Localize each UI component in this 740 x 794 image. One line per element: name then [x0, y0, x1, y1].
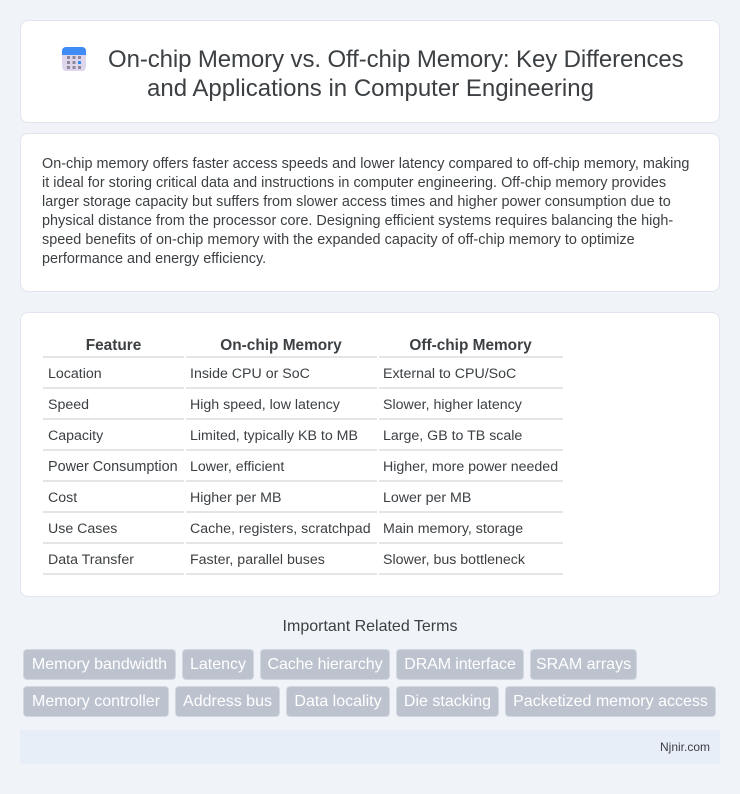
footer bar: [20, 730, 720, 764]
table header: Feature: [86, 337, 141, 354]
row: speed: Slower, higher latency: [383, 397, 522, 413]
tags: related terms: Address bus: [183, 693, 272, 710]
row: cost: Higher per MB: [190, 490, 281, 506]
row: location: Location: [48, 366, 102, 382]
tags: related terms: [23, 649, 716, 717]
row: power consumption: Power Consumption: [48, 459, 178, 475]
row: data transfer: [48, 552, 525, 568]
row: data transfer: Slower, bus bottleneck: [383, 552, 525, 568]
row: capacity: [48, 428, 522, 444]
row: capacity: Large, GB to TB scale: [383, 428, 522, 444]
text block: intro: performance and energy efficiency.: [42, 251, 266, 267]
tags: related terms: Memory bandwidth: [32, 656, 167, 673]
tags: related terms: Data locality: [294, 693, 382, 710]
tags: related terms: DRAM interface: [404, 656, 516, 673]
icon: calendar chip: [62, 47, 86, 71]
row: capacity: Limited, typically KB to MB: [190, 428, 358, 444]
tags: related terms: SRAM arrays: [536, 656, 631, 673]
row: data transfer: Faster, parallel buses: [190, 552, 325, 568]
row: capacity: Capacity: [48, 428, 103, 444]
row: location: Inside CPU or SoC: [190, 366, 310, 382]
panel: intro paragraph: [20, 133, 720, 292]
row: use cases: Main memory, storage: [383, 521, 523, 537]
text block: intro: physical distance from the processor core. Designing efficient systems requires balancing the high-: [42, 213, 673, 229]
title: [108, 46, 684, 102]
row: speed: Speed: [48, 397, 89, 413]
footer credit: Njnir.com: [660, 740, 710, 754]
row: speed: High speed, low latency: [190, 397, 340, 413]
row: use cases: Cache, registers, scratchpad: [190, 521, 371, 537]
text block: intro: larger storage capacity but suffers from slower access times and higher power consumption due to: [42, 194, 671, 210]
tags: related terms: Memory controller: [32, 693, 160, 710]
tags: related terms: Cache hierarchy: [267, 656, 382, 673]
row: cost: Cost: [48, 490, 77, 506]
text block: intro: [42, 156, 689, 267]
row: cost: Lower per MB: [383, 490, 471, 506]
table header: On-chip Memory: [220, 337, 342, 354]
row: location: [48, 366, 516, 382]
row: cost: [48, 490, 471, 506]
row: location: External to CPU/SoC: [383, 366, 516, 382]
tags: related terms: Die stacking: [404, 693, 491, 710]
title: On-chip Memory vs. Off-chip Memory: Key Differences: [108, 46, 684, 73]
row: use cases: Use Cases: [48, 521, 117, 537]
text block: intro: speed benefits of on-chip memory with the expanded capacity of off-chip memory to optimize: [42, 232, 635, 248]
row: power consumption: [48, 459, 558, 475]
text block: intro: it ideal for storing critical data and instructions in computer engineering. Off-chip memory provides: [42, 175, 666, 191]
panel: comparison table: [20, 312, 720, 597]
row: speed: [48, 397, 522, 413]
row: use cases: [48, 521, 523, 537]
row: data transfer: Data Transfer: [48, 552, 134, 568]
title: and Applications in Computer Engineering: [147, 75, 594, 102]
heading: related terms: Important Related Terms: [283, 618, 457, 635]
text block: intro: On-chip memory offers faster access speeds and lower latency compared to off-chip memory, making: [42, 156, 689, 172]
table header: Off-chip Memory: [409, 337, 532, 354]
tags: related terms: Latency: [190, 656, 246, 673]
header panel: [20, 20, 720, 123]
table header: [86, 337, 532, 354]
row: power consumption: Lower, efficient: [190, 459, 284, 475]
row: power consumption: Higher, more power needed: [383, 459, 558, 475]
tags: related terms: Packetized memory access: [513, 693, 708, 710]
